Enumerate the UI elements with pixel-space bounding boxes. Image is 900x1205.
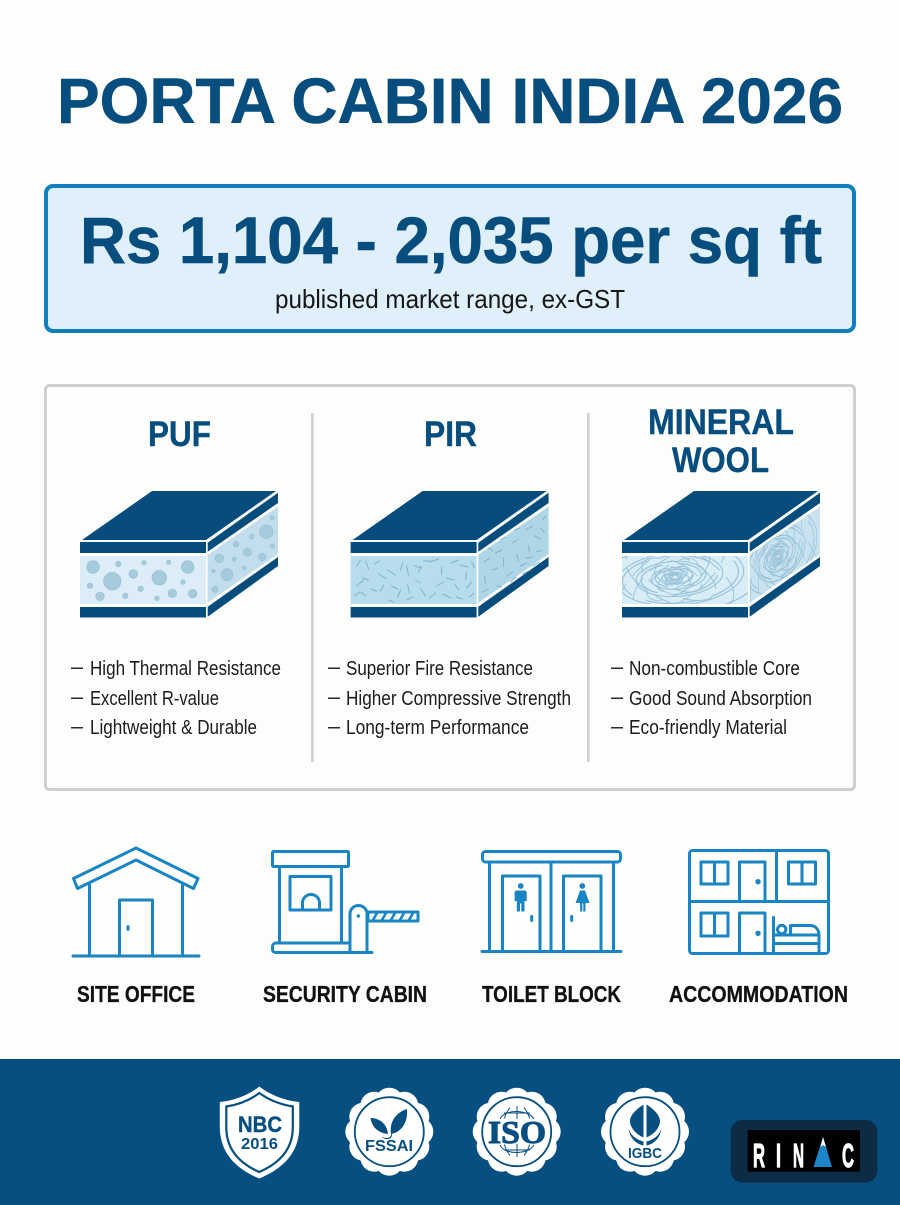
column: PUF	[71, 415, 281, 739]
use case: security cabin	[263, 852, 427, 1007]
label: site office: SITE OFFICE	[77, 981, 195, 1007]
list: Mineral Wool benefits: Good Sound Absorption	[629, 688, 812, 710]
diagram: PIR panel	[351, 491, 549, 618]
icon: toilet block	[482, 852, 621, 952]
diagram: Mineral Wool panel	[622, 491, 820, 618]
icon: house	[73, 848, 199, 956]
heading: Mineral Wool: MINERAL	[648, 403, 794, 442]
list: PUF benefits: Lightweight & Durable	[90, 717, 257, 739]
use case: accommodation	[669, 850, 848, 1007]
list: PIR benefits	[328, 658, 571, 739]
panel: insulation comparison	[46, 386, 854, 790]
label: security cabin: SECURITY CABIN	[263, 981, 427, 1007]
list: PUF benefits	[71, 658, 281, 739]
heading: PUF: PUF	[148, 415, 211, 454]
label: accommodation: ACCOMMODATION	[669, 981, 848, 1007]
title: PORTA CABIN INDIA 2026	[57, 65, 843, 137]
logo: RINAC	[730, 1120, 878, 1182]
list: Mineral Wool benefits: Non-combustible Core	[629, 658, 800, 680]
use case: site office	[73, 848, 199, 1007]
badge: IGBC	[601, 1088, 689, 1176]
badge: FSSAI	[345, 1088, 433, 1176]
badge: NBC 2016: NBC	[238, 1112, 282, 1137]
badge: ISO	[473, 1088, 561, 1176]
icon: globe lines	[500, 1106, 534, 1157]
icon: leaf building	[628, 1104, 662, 1146]
price callout	[46, 186, 854, 331]
logo: RINAC: C	[842, 1137, 854, 1174]
price note: published market range, ex-GST	[275, 284, 625, 314]
list: Mineral Wool benefits	[611, 658, 812, 739]
label: toilet block: TOILET BLOCK	[482, 981, 621, 1007]
badge: FSSAI: FSSAI	[365, 1138, 413, 1155]
icon: accommodation block	[690, 850, 828, 954]
logo: RINAC: R	[753, 1137, 765, 1174]
logo: RINAC: N	[793, 1137, 804, 1174]
badge: IGBC: IGBC	[628, 1145, 662, 1162]
price range: Rs 1,104 - 2,035 per sq ft	[80, 203, 822, 277]
diagram: PUF panel	[80, 491, 278, 618]
use case: toilet block	[482, 852, 621, 1007]
logo: RINAC: I	[776, 1137, 781, 1174]
list: PUF benefits: High Thermal Resistance	[90, 658, 281, 680]
badge: ISO: ISO	[488, 1114, 546, 1150]
list: PIR benefits: Long-term Performance	[346, 717, 529, 739]
icon: security cabin with barrier	[272, 852, 418, 952]
badge: NBC 2016	[220, 1086, 299, 1178]
column: Mineral Wool	[611, 409, 820, 738]
heading: Mineral Wool	[648, 403, 794, 480]
column: PIR	[328, 415, 571, 739]
list: Mineral Wool benefits: Eco-friendly Material	[629, 717, 787, 739]
list: PIR benefits: Higher Compressive Strength	[346, 688, 571, 710]
heading: PIR: PIR	[424, 415, 477, 454]
list: PUF benefits: Excellent R-value	[90, 688, 219, 710]
badge: NBC 2016: 2016	[241, 1136, 278, 1153]
footer band	[0, 1059, 900, 1205]
icon: leaves	[370, 1109, 407, 1139]
heading: Mineral Wool: WOOL	[672, 441, 769, 480]
list: PIR benefits: Superior Fire Resistance	[346, 658, 533, 680]
